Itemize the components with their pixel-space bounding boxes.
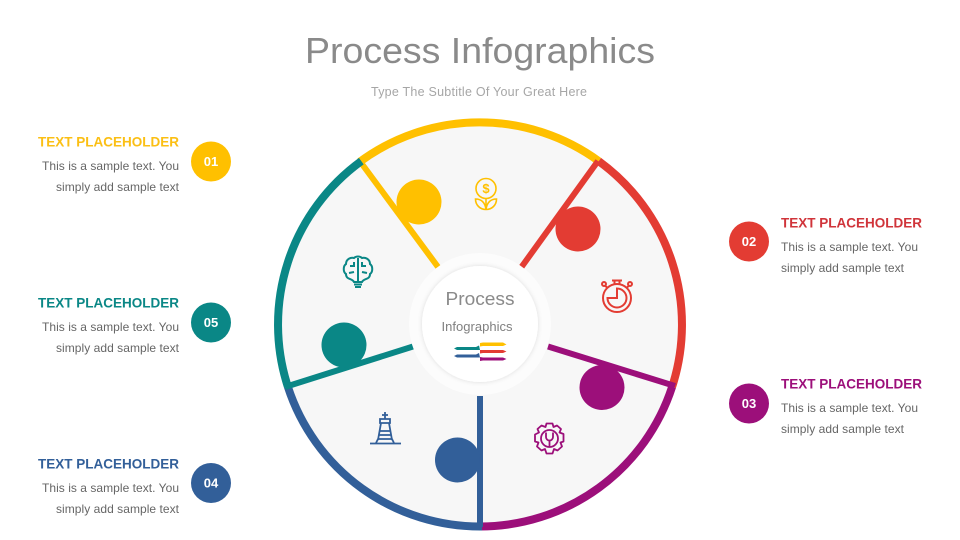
hub outer ring [409,253,551,395]
hub heading: Process [446,289,514,309]
callout 05 text: This is a sample text. You [42,320,179,334]
callout 04 text: simply add sample text [56,502,180,516]
title: Process Infographics [305,30,655,71]
callout 02 text: This is a sample text. You [781,240,918,254]
callout 02 heading: TEXT PLACEHOLDER [781,214,922,230]
dollar sign: $ [482,181,490,196]
icon: flower with dollar coin [476,178,496,210]
marker dot 01 [396,180,442,224]
marker dot 04 [435,438,480,482]
callout 04 heading: TEXT PLACEHOLDER [38,456,179,472]
callout 03 [729,376,922,436]
callout 01 number: 01 [204,154,218,169]
callout 01 badge [191,142,231,182]
icon: gear with wrench [535,424,564,454]
segment 02 arc and divider [522,161,682,387]
callout 02 [729,214,922,275]
callout 03 heading: TEXT PLACEHOLDER [781,376,922,392]
segment 05 arc and divider [278,161,413,387]
callout 01 [38,134,231,194]
callout 05 text: simply add sample text [56,341,180,355]
process wheel [278,122,682,527]
callout 03 text: This is a sample text. You [781,401,918,415]
marker dot 05 [322,322,366,368]
center hub [409,253,551,395]
hub inner disc [422,266,538,382]
callout 03 badge [729,384,769,424]
segment 03 arc and divider [480,346,675,526]
callout 05 [38,294,231,355]
callout 03 number: 03 [742,396,756,411]
callout 01 heading: TEXT PLACEHOLDER [38,134,179,150]
segment 04 arc and divider [288,387,482,527]
callout 01 text: simply add sample text [56,180,180,194]
icon: chess king [370,412,401,444]
segment 01 arc and divider [360,122,599,267]
callout 04 text: This is a sample text. You [42,481,179,495]
icon: stopwatch [602,280,632,312]
marker dot 02 [556,206,600,252]
callout 04 badge [191,463,231,503]
marker dot 03 [580,365,624,410]
callout 04 [38,456,231,516]
callout 03 text: simply add sample text [781,422,905,436]
hub subheading: Infographics [442,319,513,334]
icon: brain light bulb [344,256,372,287]
callout 01 text: This is a sample text. You [42,159,179,173]
subtitle: Type The Subtitle Of Your Great Here [371,85,587,99]
callout 02 badge [729,222,769,262]
callout 05 heading: TEXT PLACEHOLDER [38,294,179,310]
hub arrows icon [454,342,506,361]
callout 05 number: 05 [204,315,218,330]
callout 02 text: simply add sample text [781,261,905,275]
callout 04 number: 04 [204,476,219,490]
callout 02 number: 02 [742,234,756,249]
callout 05 badge [191,302,231,342]
wheel background [278,122,682,526]
